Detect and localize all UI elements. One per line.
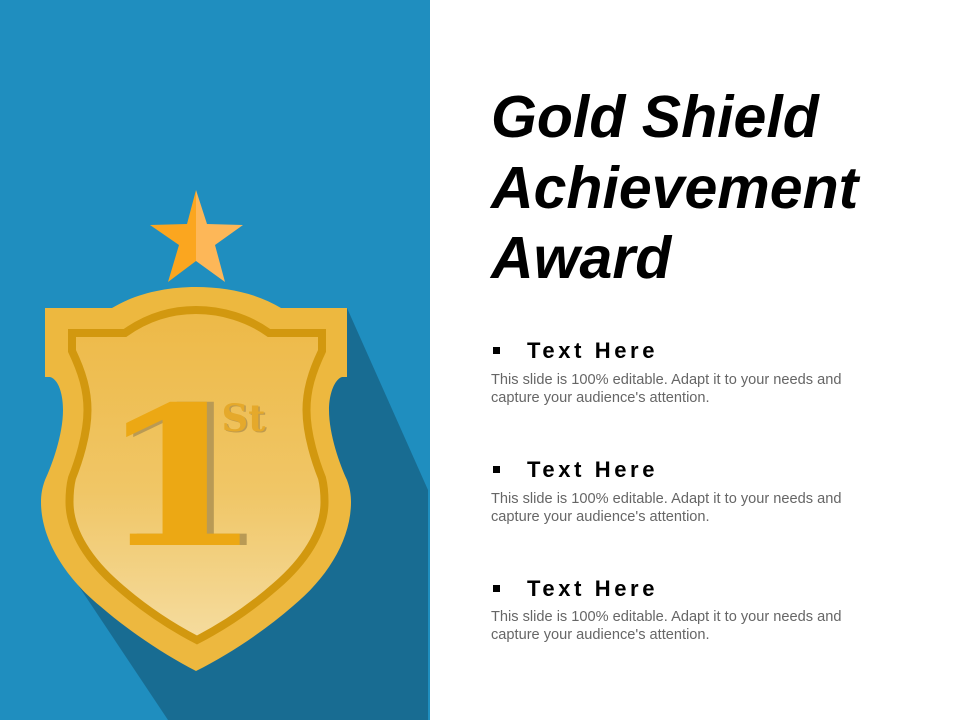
gold shield [41, 287, 351, 671]
bullet 3 marker [493, 585, 500, 592]
bullet 3 text: capture your audience's attention. [491, 627, 710, 643]
bullet 3 heading: Text Here [527, 576, 658, 601]
bullet 3 text [491, 609, 841, 643]
bullet 1 text [491, 372, 841, 406]
title [490, 84, 860, 291]
title: Achievement [491, 154, 858, 220]
ordinal suffix: St: St [222, 396, 265, 440]
illustration panel: gold shield on blue [0, 0, 430, 720]
bullet 1 marker [493, 347, 500, 354]
bullet 2 marker [493, 466, 500, 473]
long shadow [78, 308, 428, 720]
bullet 2 text: capture your audience's attention. [491, 509, 710, 525]
numeral: 1: 1 [97, 365, 264, 591]
shield outer body [41, 287, 351, 671]
ordinal suffix: St shadow: St [223, 397, 267, 441]
shield inner face with dark rim [70, 310, 324, 640]
bullet 1 heading: Text Here [527, 338, 658, 363]
bullet 2 heading: Text Here [527, 457, 658, 482]
bullet 2 text [491, 491, 841, 525]
bullet 1 text: capture your audience's attention. [491, 390, 710, 406]
bullet 3 text: This slide is 100% editable. Adapt it to your needs and [491, 609, 841, 625]
bullet 2 text: This slide is 100% editable. Adapt it to your needs and [491, 491, 841, 507]
numeral: 1 shadow: 1 [104, 365, 271, 591]
title: Award [491, 225, 671, 291]
icon: star [150, 190, 243, 282]
title: Gold Shield [491, 84, 819, 150]
bullet 1 text: This slide is 100% editable. Adapt it to your needs and [491, 372, 841, 388]
